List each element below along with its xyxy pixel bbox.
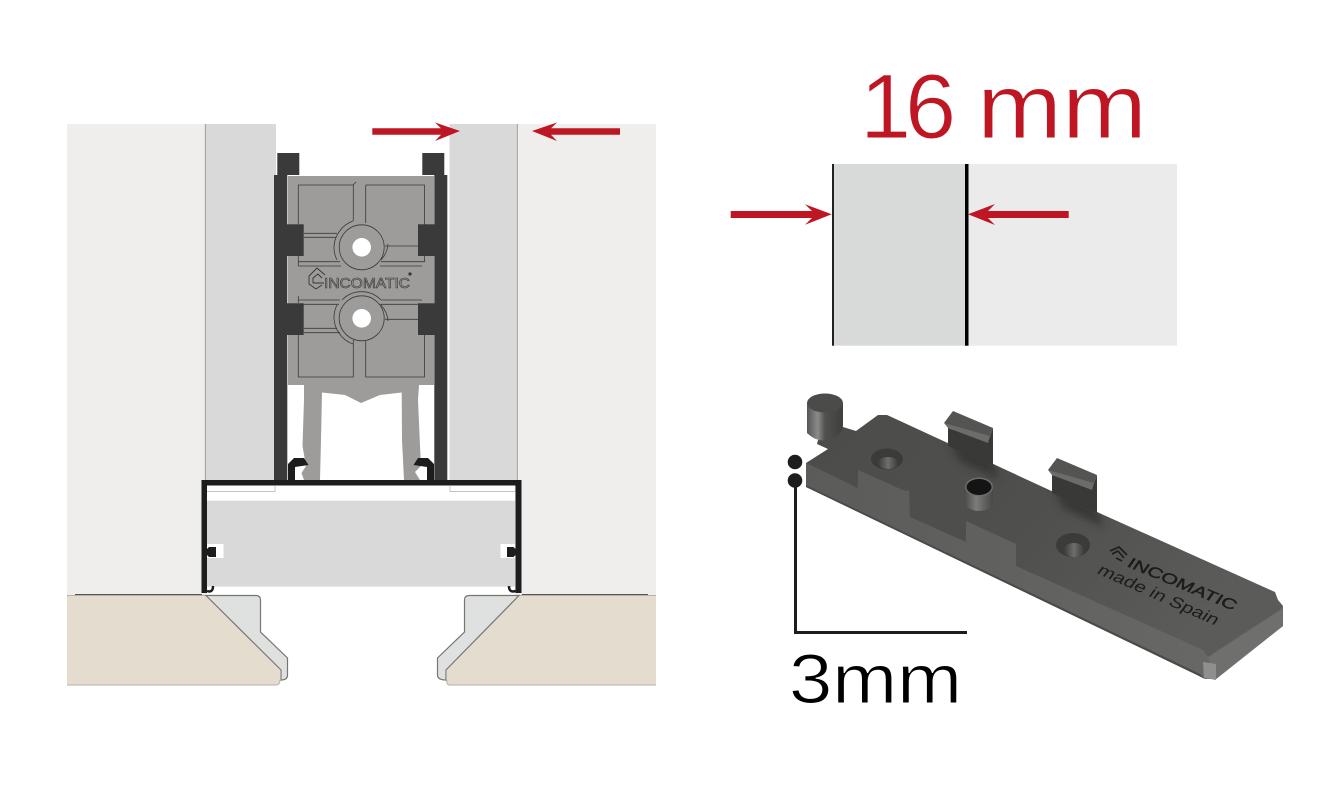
screw hole 1 (871, 448, 903, 470)
left glass panel (205, 124, 276, 492)
engraved brand text: INCOMATIC (1124, 555, 1241, 614)
glass bottom edge lines (207, 486, 515, 492)
wall background (67, 124, 656, 595)
floor lines (75, 594, 648, 596)
left edge line (832, 164, 834, 346)
hollow tube post (965, 478, 993, 511)
lower screw boss (334, 292, 388, 344)
end face highlight (1208, 608, 1283, 680)
plate with spring legs (288, 176, 434, 480)
heading: 16 mm: 6 (905, 56, 956, 158)
clip body (288, 176, 434, 480)
left trim (206, 596, 288, 680)
clip tab 2 (1048, 458, 1097, 513)
right hook (414, 458, 434, 481)
right edge line (965, 164, 968, 346)
left black rail (274, 153, 304, 481)
cylinder post (807, 394, 843, 440)
top face (806, 415, 1283, 657)
plate logo: INCOMATIC (324, 275, 410, 292)
dimension dot top (788, 455, 802, 469)
arrow: left pointing right (372, 122, 460, 141)
side face (806, 455, 1283, 679)
right floor slab (447, 595, 656, 685)
right white notch (500, 544, 515, 558)
plate logo (309, 268, 412, 292)
heading: 16 mm: mm (977, 56, 1147, 158)
clip tab 1 (944, 411, 993, 466)
dimension dot bottom (788, 473, 802, 488)
plate engraved lines (298, 182, 424, 377)
arrow: right pointing left (532, 122, 620, 141)
central gap (276, 124, 450, 486)
engraved logo icon (1110, 547, 1127, 561)
panel: 16 mm thickness detail (731, 56, 1177, 346)
profile grey infill (207, 501, 515, 587)
left hook (288, 458, 308, 481)
arrow: pointing right (731, 204, 832, 225)
heading: 16 mm: 1 (860, 56, 911, 158)
white strip under infill (207, 587, 515, 596)
slab edge lines (67, 596, 656, 685)
panel: 3D clip part (806, 394, 1283, 680)
right trim (438, 596, 519, 680)
left white notch (207, 544, 224, 558)
corner highlight (1203, 662, 1216, 680)
panel: 3 mm dimension (788, 455, 967, 718)
grey panel (832, 164, 968, 346)
upper screw boss (334, 221, 388, 270)
left floor slab (67, 595, 280, 685)
engraved origin text: made in Spain (1094, 562, 1223, 629)
right black rail (418, 153, 447, 481)
glass outer lines (205, 124, 517, 481)
hook shadows (951, 448, 1104, 526)
arrow: pointing left (968, 204, 1069, 225)
light panel (968, 164, 1177, 346)
label: 3mm: 3mm (789, 640, 962, 718)
dimension leader line (796, 480, 967, 632)
bottom edge shade (806, 485, 1205, 679)
screw hole 2 (1056, 533, 1090, 557)
right glass panel (450, 124, 518, 492)
panel: cross-section diagram (67, 122, 656, 685)
black U profile (202, 480, 522, 593)
profile interior white (207, 485, 515, 501)
